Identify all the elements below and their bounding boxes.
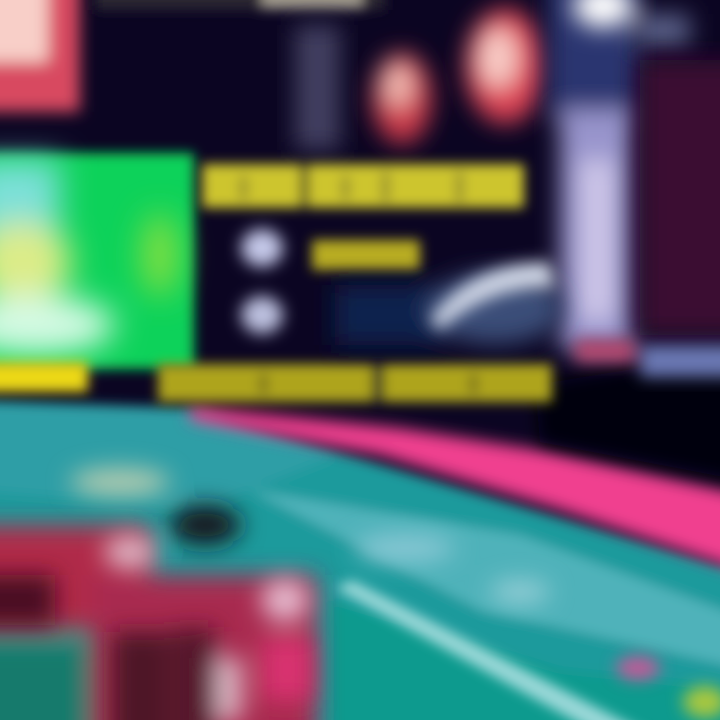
dark area at right of table <box>535 350 720 482</box>
whitish sweep <box>430 262 555 330</box>
grey column <box>295 25 340 150</box>
pink oval sign <box>372 52 432 144</box>
right pale counter <box>575 340 720 377</box>
yellow footer text <box>158 364 552 402</box>
table line: white felt marking <box>335 580 650 720</box>
top ceiling light band <box>95 0 385 10</box>
poker chips <box>0 468 550 720</box>
yellow small label <box>312 240 420 270</box>
blue dark panel and whitish shape <box>335 272 563 345</box>
white dots <box>241 229 283 334</box>
green screen <box>0 153 194 369</box>
table corner marks <box>616 656 720 718</box>
top-left pink sign <box>0 0 80 112</box>
casino table: teal felt <box>0 400 720 720</box>
blue-lavender pillar <box>548 0 638 350</box>
pink table band <box>190 406 720 574</box>
maroon panel <box>640 60 720 335</box>
pink oval sign right <box>465 8 545 124</box>
wall shapes <box>0 0 720 377</box>
bright ceiling light <box>573 0 690 46</box>
yellow headline text <box>202 164 524 208</box>
yellow strip below screen <box>0 362 88 392</box>
